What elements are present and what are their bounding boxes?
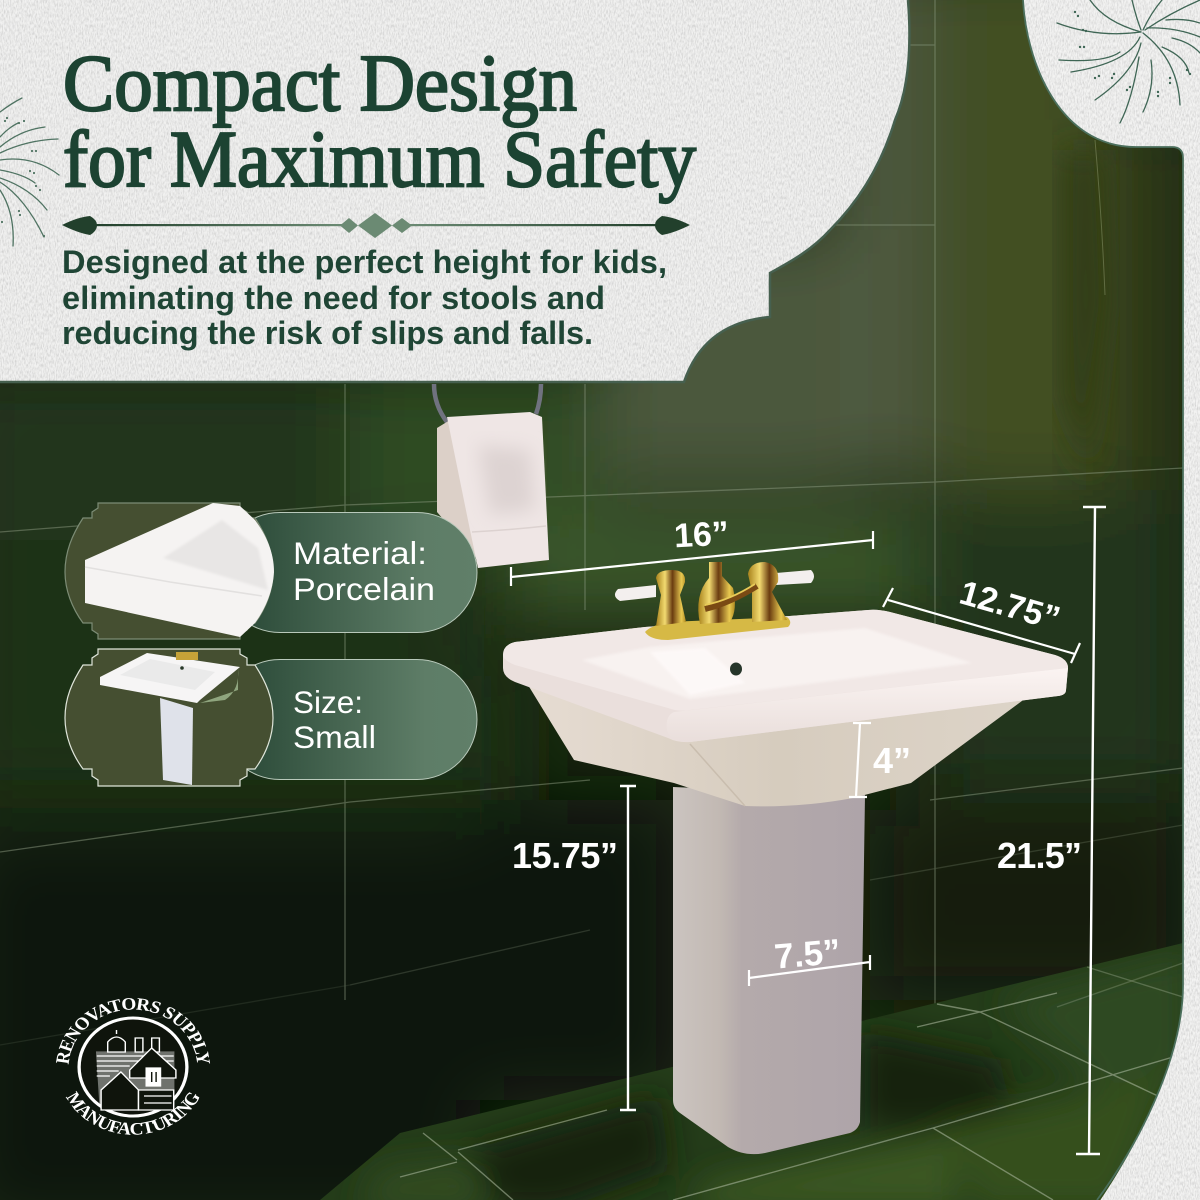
- header panel: [0, 0, 909, 382]
- description text: Designed at the perfect height for kids,: [62, 244, 667, 280]
- info pill: size: Size:: [293, 684, 363, 720]
- dimension: depth 12.75 inches: 12.75”: [955, 574, 1064, 638]
- title: for Maximum Safety: [63, 116, 696, 204]
- dimension: bowl depth 4 inches: 4”: [873, 740, 911, 781]
- sink pedestal: [673, 787, 865, 1154]
- title: [63, 40, 696, 204]
- dimension: pedestal width 7.5 inches: [749, 932, 870, 986]
- info pill: material: Material:: [293, 535, 427, 571]
- towel ring and towel: [434, 384, 549, 568]
- description text: reducing the risk of slips and falls.: [62, 315, 593, 351]
- badge image: pedestal sink: [65, 649, 273, 786]
- brand logo: Renovators Supply Manufacturing: RENOVATORS SUPPLY: [56, 998, 210, 1064]
- top right corner panel with right margin: [1023, 0, 1200, 1200]
- sink basin: [503, 610, 1068, 806]
- info pill: material: Porcelain: [293, 571, 435, 607]
- brand logo: Renovators Supply Manufacturing: MANUFACTURING: [66, 1090, 200, 1135]
- info pill: material: [65, 503, 477, 639]
- title: Compact Design: [63, 40, 577, 128]
- brand logo: Renovators Supply Manufacturing: [56, 998, 210, 1135]
- dimension: total height 21.5 inches: [997, 507, 1106, 1154]
- dimension: pedestal height 15.75 inches: 15.75”: [512, 835, 618, 876]
- info pill: size: Small: [293, 719, 376, 755]
- dimension: depth 12.75 inches: [883, 574, 1080, 663]
- dimension: width 16 inches: 16”: [673, 515, 730, 555]
- dimension: bowl depth 4 inches: [849, 723, 911, 797]
- dimension: pedestal height 15.75 inches: [512, 786, 636, 1110]
- dimension: width 16 inches: [511, 515, 873, 586]
- decorative starburst: left: [0, 98, 59, 246]
- dimension: pedestal width 7.5 inches: 7.5”: [773, 932, 842, 977]
- description text: eliminating the need for stools and: [62, 280, 605, 316]
- info pill: size: [65, 649, 477, 786]
- decorative starburst: top right: [1057, 0, 1200, 123]
- ornamental divider: [62, 213, 690, 238]
- badge image: porcelain corner: [65, 503, 274, 639]
- faucet: [615, 562, 814, 640]
- description text: [62, 244, 667, 351]
- dimension: total height 21.5 inches: 21.5”: [997, 835, 1082, 876]
- icon: house: [97, 1030, 176, 1110]
- floor tiles: [320, 943, 1190, 1200]
